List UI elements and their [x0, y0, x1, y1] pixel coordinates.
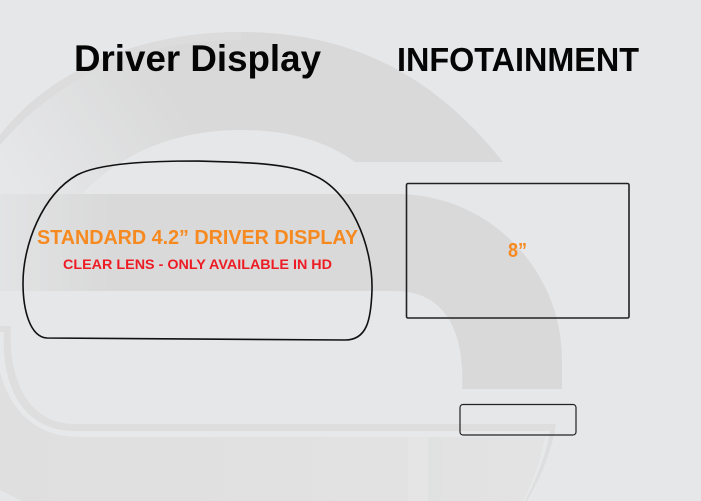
background logo watermark: [0, 32, 562, 501]
label: standard driver display: STANDARD 4.2” DRIVER DISPLAY: [37, 226, 358, 249]
driver display outline: [23, 161, 372, 340]
label: clear lens: CLEAR LENS - ONLY AVAILABLE IN HD: [63, 257, 332, 272]
heading: Driver Display: Driver Display: [74, 38, 321, 79]
infotainment screen outline: [406, 184, 629, 318]
heading: Infotainment: INFOTAINMENT: [397, 41, 639, 78]
small control panel outline: [460, 404, 576, 435]
label: 8 inch: 8”: [508, 239, 527, 262]
